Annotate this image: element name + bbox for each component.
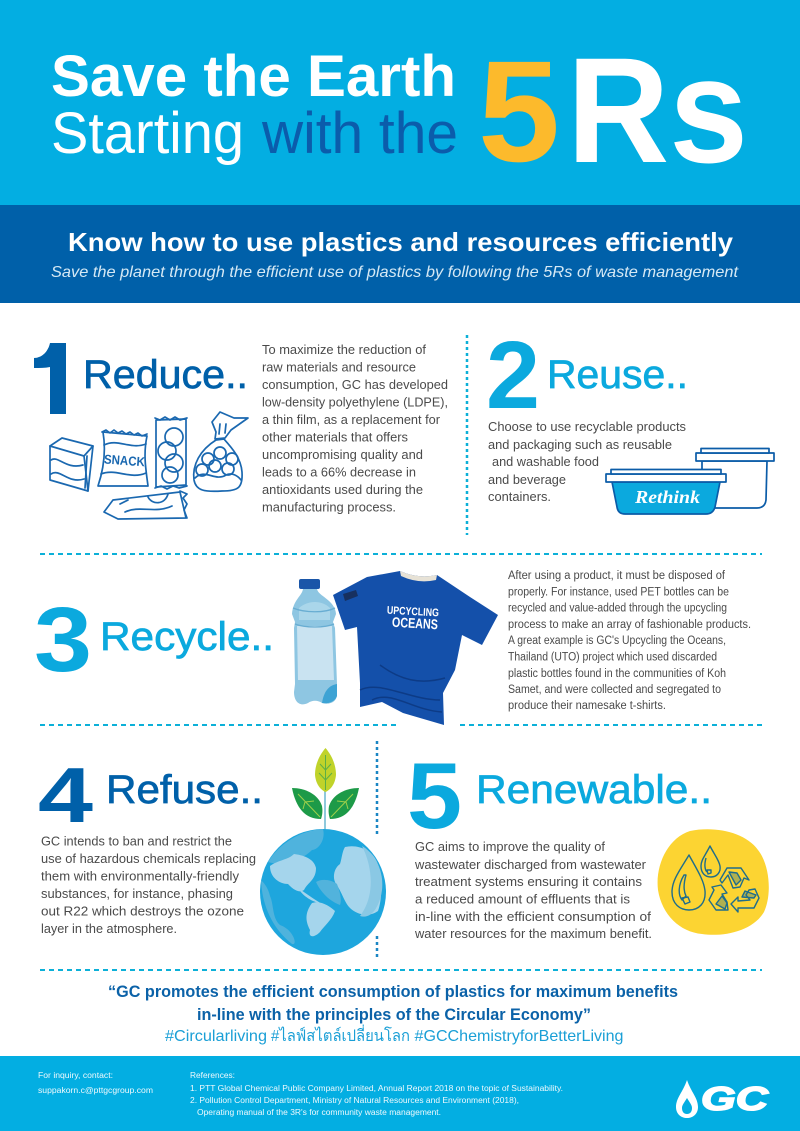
quote text: in-line with the principles of the Circular Economy” bbox=[197, 1005, 591, 1024]
text block: Reduce: raw materials and resource bbox=[262, 360, 416, 374]
text block: Reduce: antioxidants used during the bbox=[262, 482, 423, 497]
panel: 5 Renewable bbox=[407, 743, 769, 941]
text block: Recycle: After using a product, it must be disposed of bbox=[508, 570, 726, 582]
text block: Reduce: a thin film, as a replacement for bbox=[262, 412, 441, 427]
icon: globe bbox=[260, 829, 386, 955]
icon: carton box bbox=[50, 438, 93, 491]
footer bbox=[0, 1056, 800, 1131]
contact: For inquiry, contact: bbox=[38, 1071, 113, 1080]
text block: Recycle bbox=[508, 570, 751, 712]
heading Reuse: Reuse.. bbox=[547, 353, 688, 397]
text block: Refuse: out R22 which destroys the ozone bbox=[41, 904, 244, 918]
icon: squeeze tube bbox=[104, 491, 187, 519]
text block: Renewable: water resources for the maximum benefit. bbox=[414, 926, 652, 941]
icon: front container bbox=[606, 470, 726, 514]
title line 2: Starting bbox=[51, 101, 244, 166]
number 3: 3 bbox=[34, 589, 92, 691]
text block: Reduce: To maximize the reduction of bbox=[262, 342, 426, 357]
text block: Renewable: in-line with the efficient consumption of bbox=[415, 909, 651, 924]
icon: back container bbox=[690, 448, 774, 508]
text block: Refuse: GC intends to ban and restrict the bbox=[41, 834, 232, 848]
text block: Reduce: uncompromising quality and bbox=[262, 447, 423, 462]
text block: Reduce: leads to a 66% decrease in bbox=[262, 464, 416, 480]
icon: tall pack bbox=[155, 417, 187, 489]
text block: Refuse: layer in the atmosphere. bbox=[41, 921, 177, 936]
text block: Recycle: produce their namesake t-shirts. bbox=[508, 700, 666, 712]
text block: Reduce: consumption, GC has developed bbox=[262, 377, 448, 392]
icon: snack bag: SNACK bbox=[103, 452, 146, 469]
title line 2: with the bbox=[261, 101, 458, 166]
text block: Recycle: recycled and value-added through the upcycling bbox=[508, 603, 727, 615]
text block: Reduce: other materials that offers bbox=[262, 430, 408, 444]
icon: small drop bbox=[701, 846, 720, 877]
text block: Recycle: Samet, and were collected and segregated to bbox=[508, 684, 721, 696]
icon: snack bag bbox=[98, 430, 148, 486]
text block: Reuse bbox=[488, 419, 686, 504]
heading Recycle: Recycle.. bbox=[100, 615, 274, 659]
icon: front container: Rethink bbox=[634, 487, 700, 507]
panel: 1 Reduce bbox=[31, 324, 448, 519]
header banner bbox=[0, 0, 800, 205]
text block: Reuse: and packaging such as reusable bbox=[488, 437, 672, 452]
icon: plastic packaging bbox=[50, 412, 248, 519]
text block: Reuse: and beverage bbox=[488, 472, 566, 487]
hashtags: #Circularliving bbox=[165, 1028, 267, 1045]
icon: upcycling t-shirt bbox=[333, 571, 498, 725]
text block: Renewable: wastewater discharged from wastewater bbox=[414, 857, 647, 872]
number 1: 1 bbox=[31, 324, 81, 436]
text block: Recycle: process to make an array of fashionable products. bbox=[508, 619, 751, 631]
big 5: 5 bbox=[478, 31, 560, 192]
subtitle band bbox=[0, 205, 800, 303]
panel: 4 Refuse bbox=[38, 748, 386, 955]
references: Operating manual of the 3R's for community waste management. bbox=[197, 1108, 441, 1117]
heading Reduce: Reduce.. bbox=[83, 353, 248, 397]
hashtags: #ไลฟ์สไตล์เปลี่ยนโลก bbox=[271, 1024, 410, 1045]
text block: Recycle: A great example is GC's Upcycling the Oceans, bbox=[508, 635, 726, 647]
heading Renewable: Renewable.. bbox=[476, 768, 712, 812]
text block: Reuse: and washable food bbox=[492, 454, 599, 469]
icon: globe with sprout bbox=[260, 748, 386, 955]
contact: suppakorn.c@pttgcgroup.com bbox=[38, 1086, 153, 1095]
contact bbox=[38, 1071, 153, 1095]
title line 1: Save the Earth bbox=[51, 44, 456, 109]
icon: plastic bottle bbox=[292, 579, 337, 704]
text block: Reuse: containers. bbox=[488, 489, 551, 504]
icon: upcycling t-shirt: UPCYCLING bbox=[387, 605, 439, 619]
logo: GC: GC bbox=[701, 1080, 770, 1117]
references: References: bbox=[190, 1071, 235, 1080]
text block: Recycle: properly. For instance, used PET bottles can be bbox=[508, 586, 729, 598]
icon: recycling arrows bbox=[709, 868, 759, 912]
references bbox=[190, 1071, 563, 1117]
text block: Recycle: plastic bottles found in the communities of Koh bbox=[508, 668, 726, 680]
number 5: 5 bbox=[407, 743, 462, 848]
text block: Renewable: treatment systems ensuring it contains bbox=[415, 874, 643, 889]
text block: Reduce: low-density polyethylene (LDPE), bbox=[262, 394, 448, 410]
icon: sprout bbox=[292, 748, 359, 830]
hashtags: #GCChemistryforBetterLiving bbox=[414, 1028, 624, 1045]
icon: water drops and recycling on yellow blob bbox=[658, 829, 769, 935]
hashtags bbox=[165, 1024, 624, 1045]
band subheading: Save the planet through the efficient use of plastics by following the 5Rs of waste management bbox=[51, 264, 739, 281]
text block: Refuse bbox=[41, 834, 256, 936]
text block: Refuse: substances, for instance, phasing bbox=[41, 886, 233, 901]
number 2: 2 bbox=[486, 322, 540, 429]
text block: Reduce bbox=[262, 342, 448, 514]
text block: Refuse: use of hazardous chemicals replacing bbox=[41, 851, 256, 866]
text block: Renewable: GC aims to improve the quality of bbox=[415, 839, 605, 854]
number 1 bbox=[34, 343, 66, 414]
logo: GC bbox=[676, 1080, 770, 1118]
icon: large drop bbox=[672, 855, 705, 910]
icon: food containers bbox=[606, 448, 774, 514]
band heading: Know how to use plastics and resources efficiently bbox=[68, 227, 734, 257]
text block: Renewable bbox=[414, 839, 652, 941]
icon: upcycling t-shirt: OCEANS bbox=[392, 614, 438, 632]
text block: Recycle: Thailand (UTO) project which used discarded bbox=[508, 652, 717, 664]
references: 2. Pollution Control Department, Ministry of Natural Resources and Environment (2018), bbox=[190, 1096, 519, 1105]
text block: Renewable: a reduced amount of effluents that is bbox=[415, 892, 630, 906]
quote text bbox=[108, 982, 678, 1024]
closing quote bbox=[108, 982, 678, 1045]
references: 1. PTT Global Chemical Public Company Limited, Annual Report 2018 on the topic of Sustainability. bbox=[190, 1084, 563, 1093]
text block: Reuse: Choose to use recyclable products bbox=[488, 419, 686, 434]
panel: 2 Reuse bbox=[486, 322, 774, 514]
heading Refuse: Refuse.. bbox=[106, 768, 263, 812]
number 4: 4 bbox=[38, 751, 93, 839]
quote text: “GC promotes the efficient consumption of plastics for maximum benefits bbox=[108, 982, 678, 1001]
text block: Reduce: manufacturing process. bbox=[262, 500, 396, 514]
panel: 3 Recycle bbox=[34, 570, 751, 725]
text block: Refuse: them with environmentally-friendly bbox=[41, 868, 239, 884]
icon: tied bag bbox=[194, 412, 248, 491]
title line 2 bbox=[51, 101, 458, 166]
big Rs: Rs bbox=[567, 26, 748, 194]
